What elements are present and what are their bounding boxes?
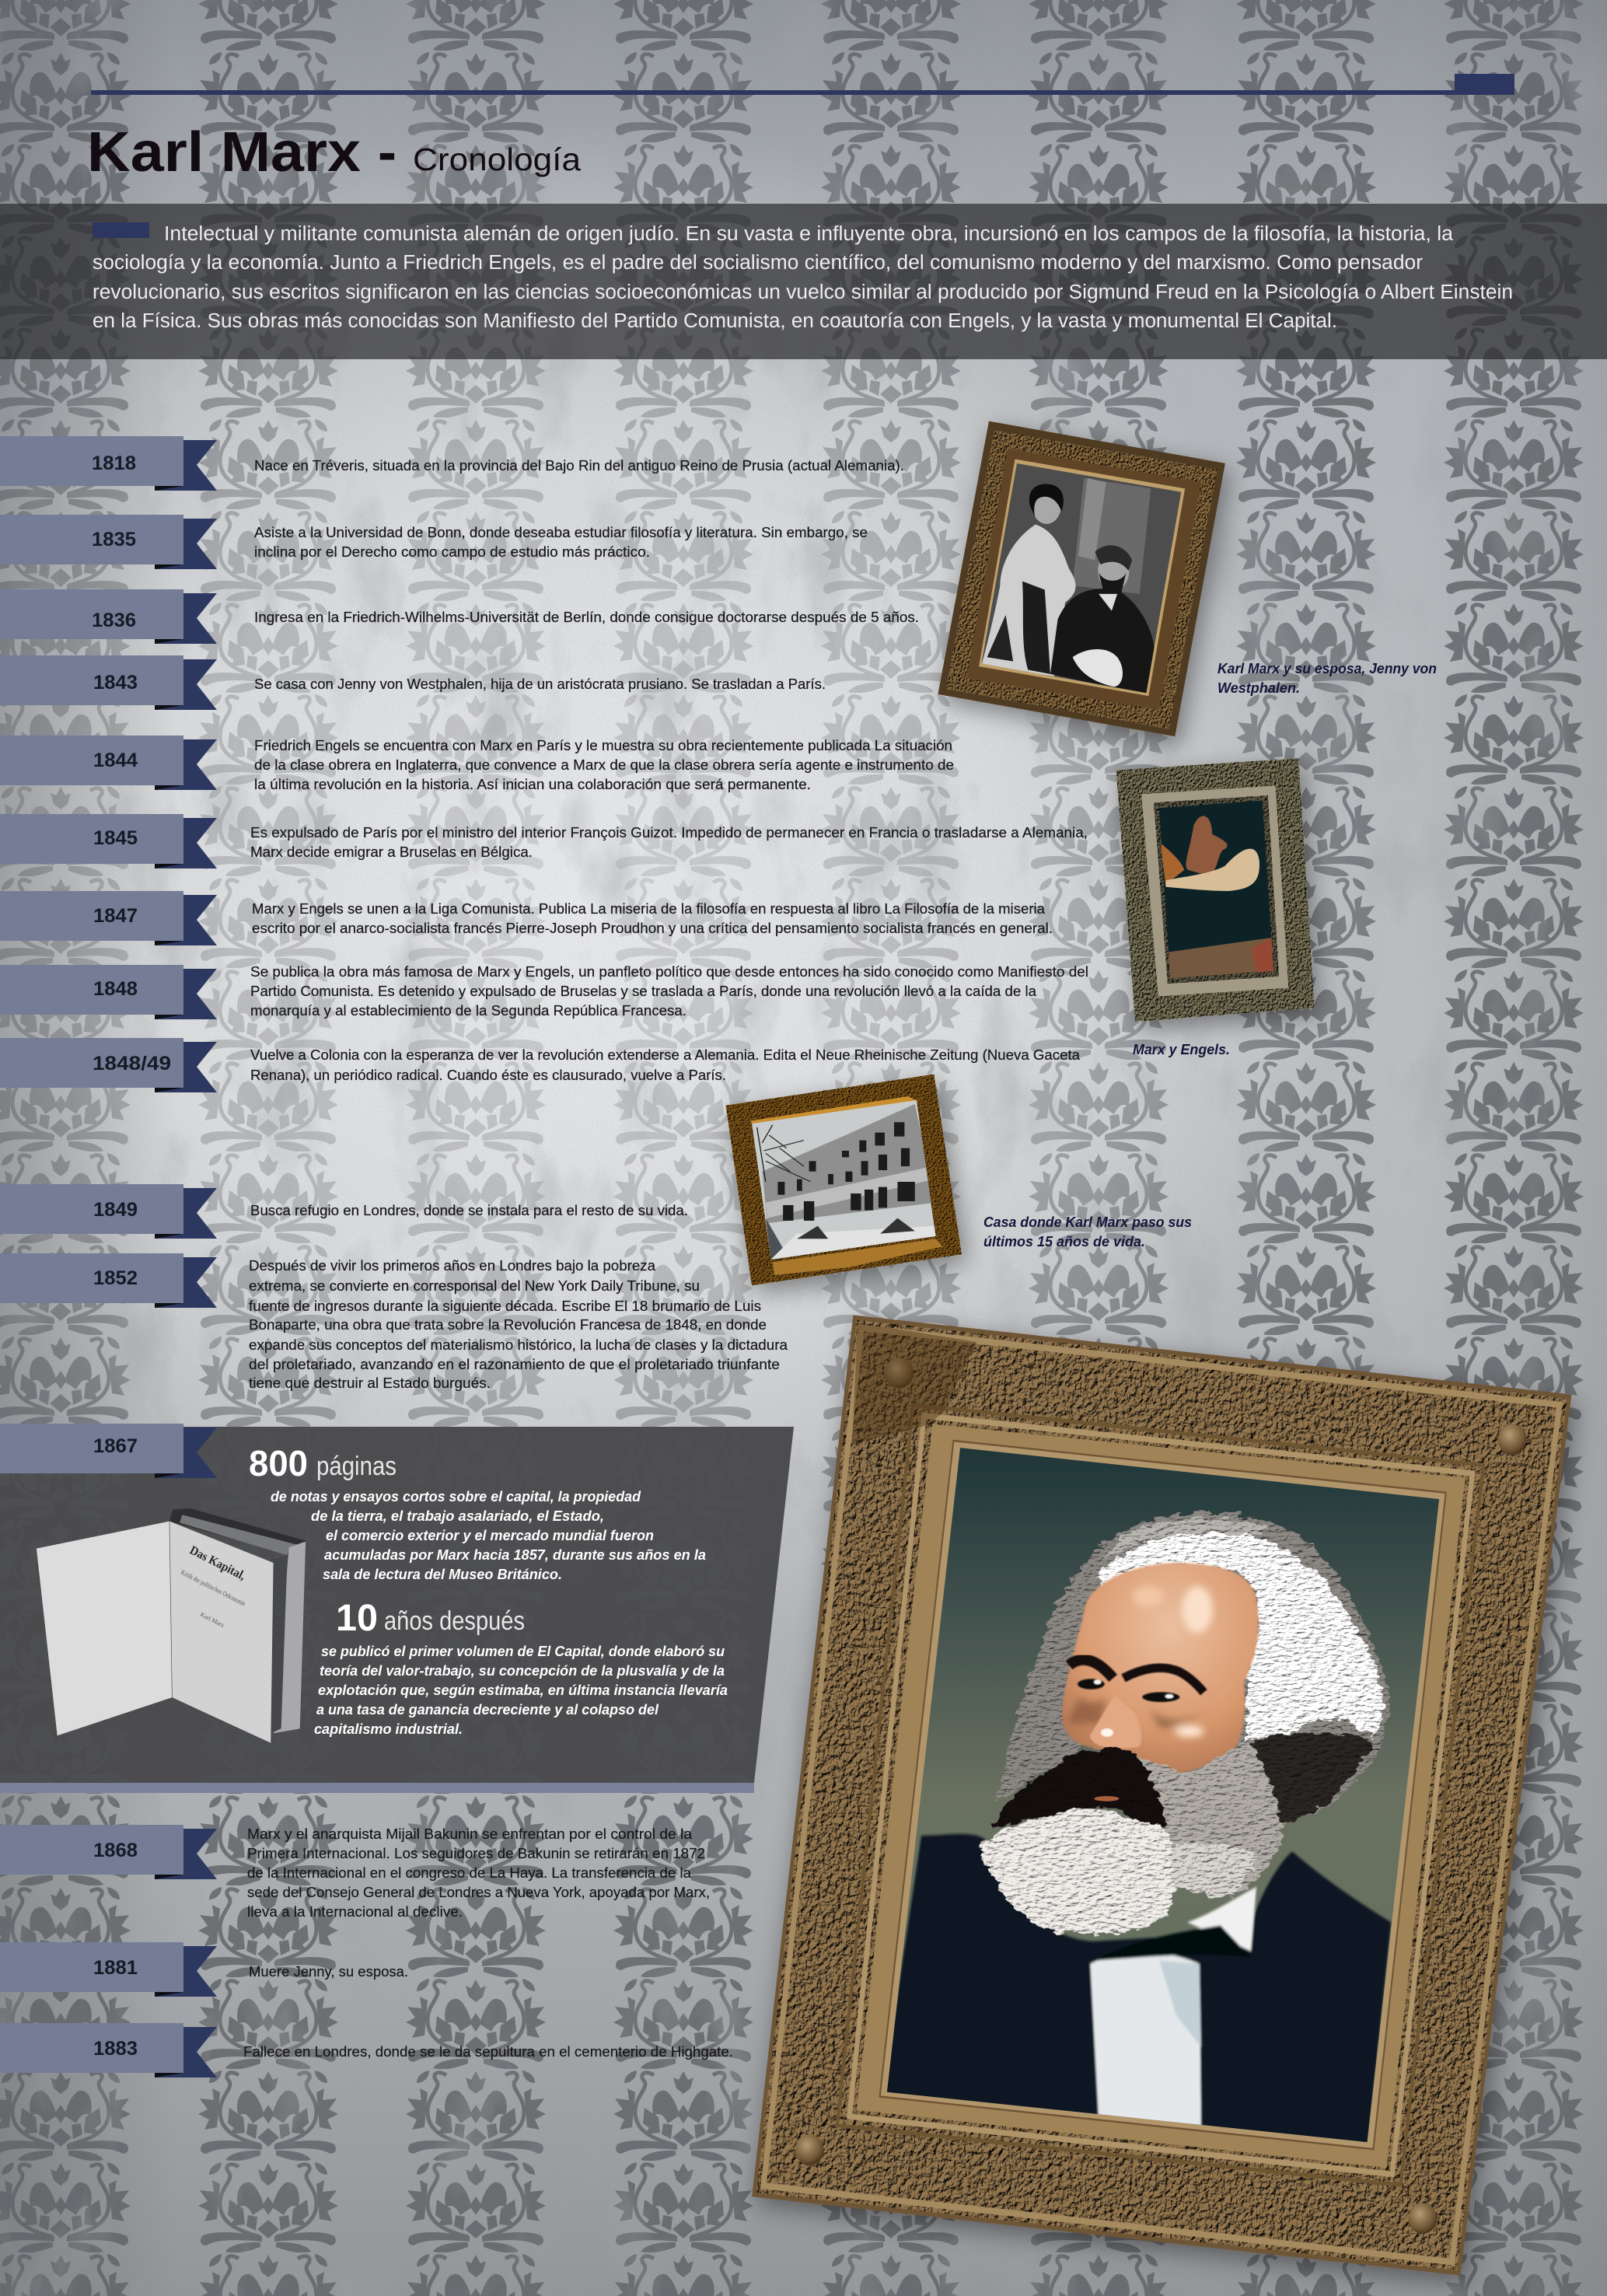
timeline entry 1852: tiene que destruir al Estado burgués. <box>249 1375 491 1391</box>
timeline entry 1883 <box>0 2023 733 2078</box>
timeline entry 1836: Ingresa en la Friedrich-Wilhelms-Universität de Berlín, donde consigue doctorarse después de 5 años. <box>254 609 919 625</box>
timeline entry 1843: Se casa con Jenny von Westphalen, hija de un aristócrata prusiano. Se trasladan a París. <box>254 676 826 692</box>
intro band: revolucionario, sus escritos significaron en las ciencias socioeconómicas un vuelco similar al producido por Sigmund Freud en la Psicología o Albert Einstein <box>93 281 1513 303</box>
caption: Marx and Jenny <box>1217 660 1437 696</box>
text: 800 paginas: de la tierra, el trabajo asalariado, el Estado, <box>311 1508 604 1524</box>
molding bands <box>837 1405 1483 2185</box>
timeline entry 1868: sede del Consejo General de Londres a Nueva York, apoyada por Marx, <box>247 1884 710 1900</box>
caption: Marx and Jenny: Westphalen. <box>1217 680 1300 696</box>
intro band: Intelectual y militante comunista alemán de origen judío. En su vasta e influyente obra, incursionó en los campos de la filosofía, la historia, la <box>164 223 1454 245</box>
timeline entry 1883: 1883 <box>93 2038 138 2060</box>
text: 10 anos despues: explotación que, según estimaba, en última instancia llevaría <box>318 1683 728 1698</box>
timeline entry 1848: Partido Comunista. Es detenido y expulsado de Bruselas y se traslada a París, donde una revolución llevó a la caída de la <box>250 983 1037 999</box>
title: Cronología <box>413 142 581 177</box>
head: hair, face and beard <box>980 1513 1389 1934</box>
timeline entry 1852: fuente de ingresos durante la siguiente década. Escribe El 18 brumario de Luis <box>249 1298 761 1314</box>
timeline entry 1836: 1836 <box>92 610 136 631</box>
caption: house <box>983 1214 1192 1249</box>
caption: house: Casa donde Karl Marx paso sus <box>983 1214 1192 1230</box>
title: Karl Marx <box>87 121 361 183</box>
timeline entry 1818: Nace en Tréveris, situada en la provincia del Bajo Rin del antiguo Reino de Prusia (actual Alemania). <box>254 457 904 474</box>
timeline entry 1849 <box>0 1184 688 1239</box>
timeline entry 1844 <box>0 736 954 792</box>
text: 10 anos despues: se publicó el primer volumen de El Capital, donde elaboró su <box>321 1644 725 1659</box>
text: 800 paginas: sala de lectura del Museo Británico. <box>323 1567 562 1582</box>
title <box>87 121 581 183</box>
timeline entry 1848: 1848 <box>93 978 138 1000</box>
timeline entry 1852: del proletariado, avanzando en el razonamiento de que el proletariado triunfante <box>249 1356 780 1372</box>
intro band <box>0 204 1607 359</box>
timeline entry 1847: escrito por el anarco-socialista francés Pierre-Joseph Proudhon y una crítica del pensamiento socialista francés en general. <box>252 920 1053 936</box>
text: 800 paginas: 800 <box>249 1443 308 1483</box>
timeline entry 1868: de la Internacional en el congreso de La Haya. La transferencia de la <box>247 1864 692 1881</box>
timeline entry 1849: 1849 <box>93 1199 138 1221</box>
timeline entry 1868: lleva a la Internacional al declive. <box>247 1903 463 1920</box>
timeline entry 1852: extrema, se convierte en corresponsal del New York Daily Tribune, su <box>249 1277 700 1294</box>
book: Das Kapital: Kritik der politischen Oekonomie <box>180 1568 247 1608</box>
timeline entry 1848/49: Vuelve a Colonia con la esperanza de ver la revolución extenderse a Alemania. Edita el Neue Rheinische Zeitung (Nueva Gaceta <box>250 1047 1081 1063</box>
text: 10 anos despues: teoría del valor-trabajo, su concepción de la plusvalía y de la <box>320 1663 725 1679</box>
text: 10 anos despues: años después <box>384 1606 525 1636</box>
timeline entry 1852: expande sus conceptos del materialismo histórico, la lucha de clases y la dictadura <box>249 1337 788 1353</box>
timeline entry 1844: 1844 <box>93 750 138 771</box>
timeline entry 1868: Primera Internacional. Los seguidores de Bakunin se retirarán en 1872 <box>247 1845 705 1861</box>
timeline entry 1867 <box>0 1424 217 1478</box>
timeline entry 1844: la última revolución en la historia. Así inician una colaboración que será permanente. <box>254 776 811 792</box>
timeline entry 1848 <box>0 963 1088 1019</box>
intro band: en la Física. Sus obras más conocidas son Manifiesto del Partido Comunista, en coautoría con Engels, y la vasta y monumental El Capital. <box>93 310 1337 332</box>
timeline entry 1852: 1852 <box>93 1267 138 1289</box>
timeline entry 1818: 1818 <box>92 453 136 474</box>
timeline entry 1848/49 <box>0 1038 1081 1092</box>
timeline entry 1881: 1881 <box>93 1957 138 1979</box>
timeline entry 1868 <box>0 1825 710 1920</box>
timeline entry 1881: Muere Jenny, su esposa. <box>249 1963 408 1980</box>
timeline entry 1843: 1843 <box>93 672 138 694</box>
text: 10 anos despues <box>314 1598 728 1737</box>
timeline entry 1868: 1868 <box>93 1840 138 1861</box>
timeline entry 1848: monarquía y al establecimiento de la Segunda República Francesa. <box>250 1002 686 1019</box>
outer ornamental frame <box>754 1318 1570 2273</box>
timeline entry 1867: 1867 <box>93 1435 138 1457</box>
timeline entry 1845: Es expulsado de París por el ministro del interior François Guizot. Impedido de permanecer en Francia o trasladarse a Alemania, <box>250 824 1088 840</box>
corner rosettes <box>795 1358 1527 2234</box>
text: 800 paginas <box>249 1443 706 1582</box>
timeline entry 1844: Friedrich Engels se encuentra con Marx en París y le muestra su obra recientemente publicada La situación <box>254 737 952 753</box>
caption: house: últimos 15 años de vida. <box>983 1233 1145 1249</box>
timeline entry 1845: 1845 <box>93 827 138 849</box>
timeline entry 1818 <box>0 436 904 491</box>
text: 10 anos despues: 10 <box>336 1598 378 1639</box>
timeline entry 1852 <box>0 1253 788 1391</box>
panel: 1867 dark panel <box>0 1427 794 1793</box>
caption: Marx and Jenny: Karl Marx y su esposa, Jenny von <box>1217 660 1437 676</box>
timeline entry 1847: Marx y Engels se unen a la Liga Comunista. Publica La miseria de la filosofía en respuesta al libro La Filosofía de la miseria <box>252 900 1046 917</box>
timeline entry 1881 <box>0 1942 408 1997</box>
text: 800 paginas: páginas <box>316 1452 397 1481</box>
timeline entry 1836 <box>0 589 919 644</box>
inner mat <box>857 1424 1466 2168</box>
text: 800 paginas: de notas y ensayos cortos sobre el capital, la propiedad <box>271 1489 641 1504</box>
timeline entry 1835: Asiste a la Universidad de Bonn, donde deseaba estudiar filosofía y literatura. Sin embargo, se <box>254 524 868 540</box>
timeline entry 1852: Después de vivir los primeros años en Londres bajo la pobreza <box>249 1257 656 1274</box>
text: 10 anos despues: a una tasa de ganancia decreciente y al colapso del <box>316 1702 659 1718</box>
timeline entry 1847: 1847 <box>93 905 138 927</box>
text: 10 anos despues: capitalismo industrial. <box>314 1721 463 1737</box>
timeline entry 1868: Marx y el anarquista Mijail Bakunin se enfrentan por el control de la <box>247 1826 693 1842</box>
timeline entry 1852: Bonaparte, una obra que trata sobre la Revolución Francesa de 1848, en donde <box>249 1316 767 1333</box>
portrait painting background and clothing <box>882 1448 1439 2147</box>
timeline entry 1845: Marx decide emigrar a Bruselas en Bélgica. <box>250 844 533 860</box>
framed portrait: Karl Marx <box>754 1318 1570 2273</box>
caption: Marx and Engels: Marx y Engels. <box>1133 1041 1230 1057</box>
title: - <box>378 121 397 183</box>
dark corner patina <box>852 1323 976 1445</box>
timeline entry 1843 <box>0 655 826 710</box>
timeline entry 1848: Se publica la obra más famosa de Marx y Engels, un panfleto político que desde entonces ha sido conocido como Manifiesto del <box>250 963 1088 980</box>
framed photo: Marx and Jenny <box>938 421 1225 736</box>
timeline entry 1883: Fallece en Londres, donde se le da sepultura en el cementerio de Highgate. <box>243 2043 733 2060</box>
book: Das Kapital: Karl Marx <box>199 1611 225 1629</box>
timeline entry 1849: Busca refugio en Londres, donde se instala para el resto de su vida. <box>250 1202 688 1218</box>
timeline entry 1847 <box>0 891 1053 945</box>
top rule with corner square <box>91 74 1514 95</box>
timeline entry 1844: de la clase obrera en Inglaterra, que convence a Marx de que la clase obrera sería agente e instrumento de <box>254 757 954 773</box>
book: Das Kapital <box>37 1508 306 1743</box>
framed photo: Marx and Engels <box>1116 758 1315 1022</box>
book: Das Kapital: Das Kapital, <box>187 1543 247 1583</box>
timeline entry 1835 <box>0 515 868 569</box>
timeline entry 1845 <box>0 814 1088 868</box>
timeline entry 1848/49: 1848/49 <box>93 1053 171 1075</box>
intro band: sociología y la economía. Junto a Friedrich Engels, es el padre del socialismo científico, del comunismo moderno y del marxismo. Como pensador <box>93 252 1424 274</box>
timeline entry 1835: 1835 <box>92 529 136 550</box>
text: 800 paginas: acumuladas por Marx hacia 1857, durante sus años en la <box>324 1547 706 1563</box>
framed photo: house in London <box>725 1075 962 1285</box>
text: 800 paginas: el comercio exterior y el mercado mundial fueron <box>326 1528 654 1543</box>
timeline entry 1848/49: Renana), un periódico radical. Cuando éste es clausurado, vuelve a París. <box>250 1067 726 1083</box>
timeline entry 1835: inclina por el Derecho como campo de estudio más práctico. <box>254 543 650 560</box>
